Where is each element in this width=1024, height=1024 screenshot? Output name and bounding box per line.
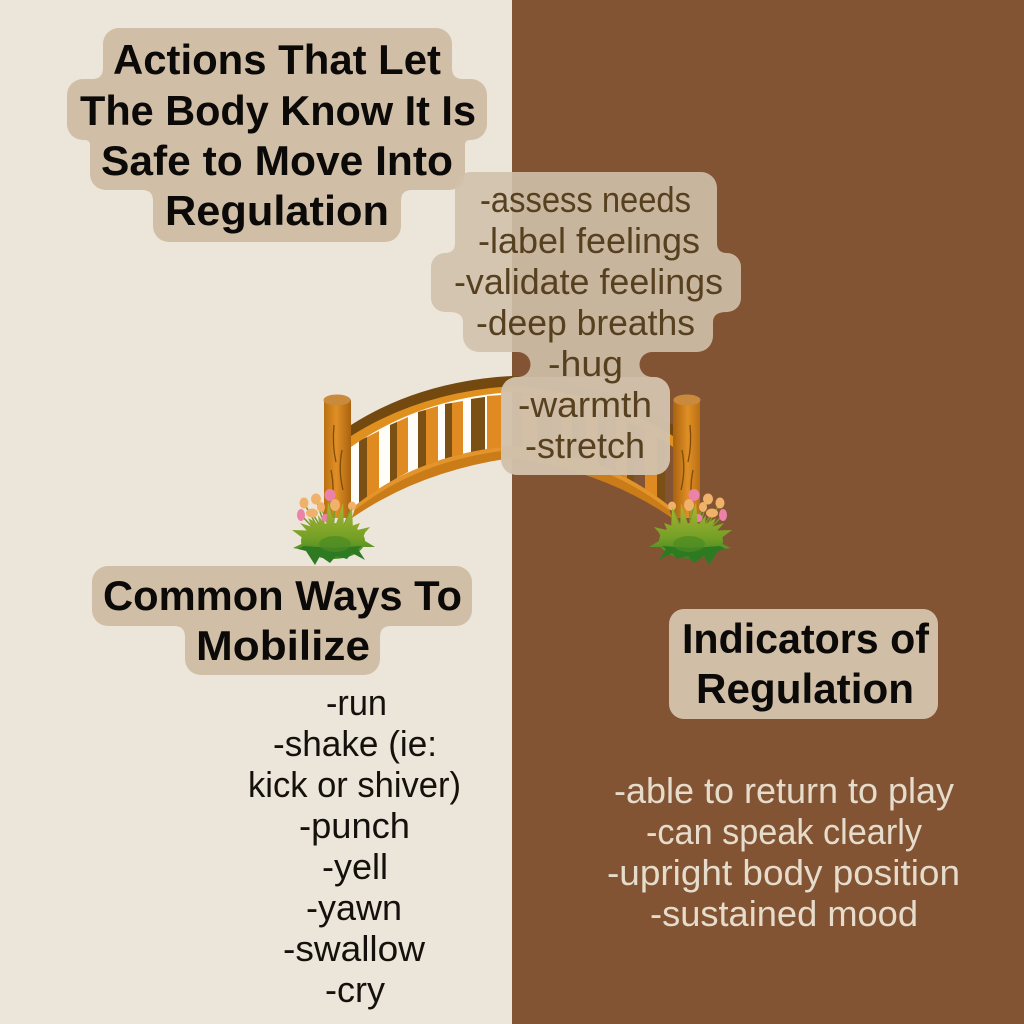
- heading: actions title: Regulation: [165, 187, 389, 234]
- text block: mobilize list: -swallow: [283, 928, 426, 969]
- heading: actions title: The Body Know It Is: [80, 87, 476, 134]
- heading: indicators of regulation: [669, 609, 938, 719]
- heading: common ways to mobilize: [92, 566, 472, 675]
- panel: regulation actions list: -deep breaths: [476, 302, 695, 343]
- heading: indicators of regulation: Regulation: [696, 665, 914, 712]
- text block: indicators list: -able to return to play: [614, 770, 954, 811]
- text block: mobilize list: -shake (ie:: [273, 723, 437, 764]
- panel: regulation actions list: [431, 172, 741, 475]
- panel: regulation actions list: -hug: [548, 343, 623, 384]
- heading: indicators of regulation: Indicators of: [682, 615, 930, 662]
- background: right brown half: [512, 0, 1024, 1024]
- panel: regulation actions list: -label feelings: [478, 220, 700, 261]
- heading: common ways to mobilize: Mobilize: [196, 622, 370, 669]
- text block: mobilize list: -run: [326, 682, 387, 723]
- panel: regulation actions list: -validate feelings: [454, 261, 723, 302]
- heading: actions title: Actions That Let: [113, 36, 441, 83]
- background: left cream half: [0, 0, 512, 1024]
- heading: actions title: Safe to Move Into: [101, 137, 453, 184]
- heading: actions title: [67, 28, 487, 242]
- text block: mobilize list: -cry: [325, 969, 385, 1010]
- panel: regulation actions list: -warmth: [518, 384, 652, 425]
- panel: regulation actions list: -stretch: [525, 425, 645, 466]
- text block: mobilize list: -yell: [322, 846, 388, 887]
- text block: mobilize list: [248, 682, 461, 1010]
- text block: indicators list: -sustained mood: [650, 893, 918, 934]
- text block: mobilize list: -yawn: [306, 887, 402, 928]
- text block: indicators list: -can speak clearly: [646, 811, 922, 852]
- text block: mobilize list: kick or shiver): [248, 764, 461, 805]
- text block: mobilize list: -punch: [299, 805, 410, 846]
- icon: wooden bridge with flower bushes: [292, 376, 732, 565]
- panel: regulation actions list: -assess needs: [480, 179, 691, 220]
- heading: common ways to mobilize: Common Ways To: [103, 572, 462, 619]
- text block: indicators list: [607, 770, 960, 934]
- text block: indicators list: -upright body position: [607, 852, 960, 893]
